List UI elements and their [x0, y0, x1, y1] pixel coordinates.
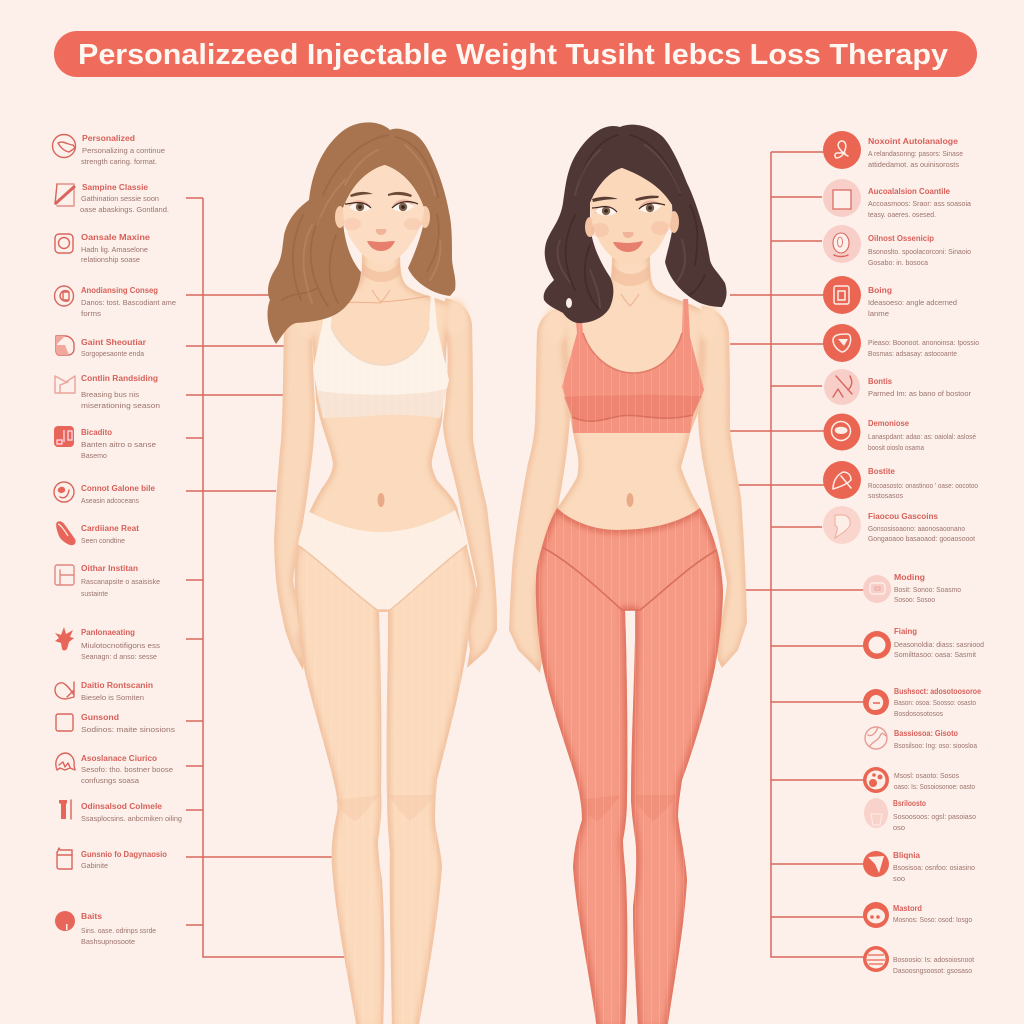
left item 7: [54, 426, 156, 460]
right figure hair: [544, 125, 727, 323]
left item 9: [56, 521, 139, 545]
text 15: Bsriloosto: [893, 798, 926, 808]
text 11: [81, 627, 160, 661]
icon 10: [863, 575, 891, 603]
text 9: Seen condtine: [81, 536, 125, 545]
icon 6: [824, 369, 860, 405]
text 10: Sosoo: Sosoo: [894, 595, 935, 604]
left item 16: [57, 848, 167, 870]
text 11: Somilttasoo: oasa: Sasmit: [894, 650, 976, 659]
text 10: Moding: [894, 572, 925, 582]
right item 11: [863, 626, 984, 659]
text 8: Bostite: [868, 466, 895, 476]
icon 12: [55, 682, 74, 699]
icon 13: [56, 714, 73, 731]
text 3: [868, 233, 971, 267]
icon 17: [863, 902, 889, 928]
text 9: Cardiiane Reat: [81, 523, 139, 533]
left figure hair: [268, 122, 455, 344]
left connector lines: [186, 198, 347, 957]
icon 8: [823, 461, 861, 499]
text 17: Baits: [81, 911, 102, 921]
right item 16: [863, 850, 975, 883]
right figure body: [509, 255, 747, 673]
text 12: Bosdososotosos: [894, 709, 943, 718]
text 4: Anodiansing Conseg: [81, 285, 158, 295]
text 16: soo: [893, 874, 905, 883]
text 10: Oithar Institan: [81, 563, 138, 573]
text 10: [894, 572, 961, 604]
text 18: Dasoosngsoosot: gsosaso: [893, 966, 972, 975]
text 15: oso: [893, 823, 905, 832]
text 13: [894, 728, 977, 750]
icon 7: [824, 414, 860, 450]
text 8: [81, 483, 155, 505]
text 15: [893, 798, 976, 832]
text 11: Deasonoldia: diass: sasniood: [894, 640, 984, 649]
right figure coral top: [562, 299, 704, 433]
text 13: [81, 712, 175, 734]
text 8: Rocoasosto: onastinoo ' oase: oocotoo: [868, 481, 978, 490]
text 17: [893, 903, 972, 924]
text 17: Sins. oase. odrinps ssrde: [81, 926, 156, 935]
text 3: Hadn lig. Amaselone: [81, 245, 148, 254]
icon 15: [59, 800, 71, 819]
right item 3: [823, 225, 971, 267]
icon 6: [55, 376, 75, 393]
text 1: Noxoint Autolanaloge: [868, 136, 958, 146]
text 10: Bosit: Sonoo: Soasmo: [894, 585, 961, 594]
text 2: Gathination sessie soon: [81, 194, 159, 203]
text 12: Bushsoct: adosotoosoroe: [894, 686, 981, 696]
text 4: forms: [81, 309, 101, 318]
text 2: Sampine Classie: [82, 182, 148, 192]
text 6: [81, 373, 160, 410]
text 4: Ideasoeso: angle adcerned: [868, 298, 957, 307]
left figure face: [335, 165, 430, 264]
left figure body: [274, 250, 497, 1024]
left item 10: [55, 563, 160, 598]
text 1: Personalizing a continue: [82, 146, 165, 155]
text 3: Oansale Maxine: [81, 232, 150, 242]
icon 2: [823, 179, 861, 217]
icon 4: [54, 286, 74, 306]
right item 5: [823, 324, 979, 362]
text 16: Gabinite: [81, 861, 108, 870]
title banner: [54, 31, 977, 77]
left item 5: [56, 336, 147, 358]
icon 2: [55, 184, 75, 206]
right figure coral leggings: [530, 508, 730, 1024]
right connector lines: [730, 152, 864, 957]
icon 5: [56, 336, 74, 355]
icon 5: [823, 324, 861, 362]
text 5: Pieaso: Boonoot. anonoinsa: Ipossio: [868, 338, 979, 347]
icon 1: [52, 134, 76, 158]
text 13: Gunsond: [81, 712, 119, 722]
right item 18: [863, 946, 974, 975]
text 3: Gosabo: in. bosoca: [868, 258, 928, 267]
text 12: [81, 680, 153, 702]
icon 7: [54, 426, 74, 447]
right item 9: [823, 506, 975, 544]
text 7: Banten aitro o sanse: [81, 440, 156, 449]
text 3: relationship soase: [81, 255, 140, 264]
text 16: Bliqnia: [893, 850, 920, 860]
text 1: strength caring. format.: [81, 157, 157, 166]
left item 6: [55, 373, 160, 410]
right item 7: [824, 414, 976, 452]
text 12: Bieselo is Somiten: [81, 693, 144, 702]
text 10: Rascanapsite o asaisiske: [81, 577, 160, 586]
left item 17: [55, 911, 156, 946]
text 17: Mastord: [893, 903, 922, 913]
text 4: Danos: tost. Bascodiant ame: [81, 298, 176, 307]
text 15: Odinsalsod Colmele: [81, 801, 162, 811]
text 17: Bashsupnosoote: [81, 937, 135, 946]
left item 2: [55, 182, 169, 214]
text 1: attidedamot. as ouinisorosts: [868, 160, 959, 169]
icon 4: [823, 276, 861, 314]
text 6: Parmed Im: as bano of bostoor: [868, 389, 972, 398]
text 15: [81, 801, 182, 823]
left item 12: [55, 680, 153, 702]
right figure: [509, 125, 747, 1024]
icon 14: [863, 767, 889, 793]
text 7: Bicadito: [81, 427, 112, 437]
left item 13: [56, 712, 175, 734]
left item 3: [55, 232, 150, 264]
text 2: Accoasmoos: Sraor: ass soasoia: [868, 199, 971, 208]
icon 1: [823, 131, 861, 169]
icon 10: [55, 565, 74, 585]
text 3: [81, 232, 150, 264]
icon 16: [863, 851, 889, 877]
icon 18: [863, 946, 889, 972]
text 2: oase abaskings. Gontland.: [80, 205, 169, 214]
right item 15: [864, 798, 976, 832]
text 10: [81, 563, 160, 598]
icon 14: [56, 753, 75, 770]
text 11: Miulotocnotifigons ess: [81, 641, 160, 650]
text 1: [81, 133, 165, 166]
text 8: Connot Galone bile: [81, 483, 155, 493]
text 7: [868, 418, 976, 452]
text 6: Breasing bus nis: [81, 390, 139, 399]
text 11: [894, 626, 984, 659]
right figure face: [585, 168, 679, 265]
icon 3: [823, 225, 861, 263]
text 13: Sodinos: maite sinosions: [81, 725, 175, 734]
text 15: Ssasplocsins. anbcmiken oiling: [81, 814, 182, 823]
text 14: [894, 771, 975, 791]
left item 4: [54, 285, 176, 318]
icon 15: [864, 798, 888, 828]
text 7: Demoniose: [868, 418, 909, 428]
left item 15: [59, 800, 182, 823]
text 7: Basemo: [81, 451, 107, 460]
text 9: Fiaocou Gascoins: [868, 511, 938, 521]
text 17: [81, 911, 156, 946]
text 3: Bsonoslto. spoolacorconi: Sinaoio: [868, 247, 971, 256]
text 7: boosit oioslo osama: [868, 443, 924, 452]
right item 17: [863, 902, 972, 928]
text 5: [81, 337, 147, 358]
text 14: oaso: Is: Sosoiosonoe: oasto: [894, 782, 975, 791]
text 2: Aucoalalsion Coantile: [868, 186, 950, 196]
right item 14: [863, 767, 975, 793]
title banner: Personalizzeed Injectable Weight Tusiht lebcs Loss Therapy: [78, 39, 948, 71]
text 12: [894, 686, 981, 718]
text 4: [868, 285, 957, 318]
text 13: Bassiosoa: Gisoto: [894, 728, 958, 738]
text 11: Seanagn: d anso: sesse: [81, 652, 157, 661]
text 8: sostosasos: [868, 491, 903, 500]
text 18: Bosoosio: Is: adosoiosnoot: [893, 955, 974, 964]
icon 11: [863, 631, 891, 659]
text 15: Sosoosoos: ogsl: pasoiaso: [893, 812, 976, 821]
text 2: [80, 182, 169, 214]
text 16: Bsosisoa: osnfoo: osiasino: [893, 863, 975, 872]
left figure: [268, 122, 497, 1024]
text 11: Panlonaeating: [81, 627, 135, 637]
text 18: [893, 955, 974, 975]
text 8: [868, 466, 978, 500]
text 14: Msosl: osaoto: Sosos: [894, 771, 959, 780]
text 6: Bontis: [868, 376, 892, 386]
text 5: Gaint Sheoutiar: [81, 337, 147, 347]
right item 4: [823, 276, 957, 318]
text 12: Daitio Rontscanin: [81, 680, 153, 690]
text 8: Aseasin adcoceans: [81, 496, 139, 505]
text 5: Bosmas: adsasay: astocoante: [868, 349, 957, 358]
left figure cream bra: [313, 294, 449, 418]
right item 8: [823, 461, 978, 500]
text 1: A relandasonng: pasors: Sinase: [868, 149, 963, 158]
icon 3: [55, 234, 73, 253]
text 16: [81, 849, 167, 870]
icon 17: [55, 911, 75, 931]
text 14: confusngs soasa: [81, 776, 139, 785]
text 17: Mosnos: Soso: osod: Iosgo: [893, 915, 972, 924]
left item 14: [56, 753, 173, 785]
text 14: Asoslanace Ciurico: [81, 753, 157, 763]
text 4: lanme: [868, 309, 889, 318]
icon 12: [863, 689, 889, 715]
text 4: Boing: [868, 285, 892, 295]
text 3: Oilnost Ossenicip: [868, 233, 934, 243]
text 5: Sorgopesaonte enda: [81, 349, 144, 358]
text 11: Fiaing: [894, 626, 917, 636]
left item 11: [55, 627, 160, 661]
right column labels: [823, 131, 984, 975]
icon 9: [823, 506, 861, 544]
icon 9: [56, 521, 76, 545]
left column labels: [52, 133, 182, 946]
text 2: teasy. oaeres. osesed.: [868, 210, 936, 219]
right item 6: [824, 369, 972, 405]
text 9: Gonsosisoaono: aaonosaoonano: [868, 524, 965, 533]
text 1: [868, 136, 963, 169]
text 1: Personalized: [82, 133, 135, 143]
text 7: Lanaspdant: adao: as: oaiolal: aslosé: [868, 432, 976, 441]
text 4: [81, 285, 176, 318]
text 14: [81, 753, 173, 785]
text 9: [868, 511, 975, 543]
text 13: Bsosilsoo: Ing: oso: sioosloa: [894, 741, 977, 750]
text 12: Bason: osoa: Soosso: osasto: [894, 698, 976, 707]
left item 8: [54, 482, 155, 505]
text 9: Gongaoaoo basaoaod: gooaosooot: [868, 534, 975, 543]
right item 13: [865, 727, 977, 750]
icon 11: [55, 627, 74, 650]
right item 12: [863, 686, 981, 718]
text 14: Sesofo: tho. bostner boose: [81, 765, 173, 774]
text 6: miserationing season: [81, 401, 160, 410]
left item 1: [52, 133, 165, 166]
icon 16: [57, 848, 72, 869]
text 16: Gunsnio fo Dagynaosio: [81, 849, 167, 859]
left figure cream briefs: [298, 510, 467, 610]
icon 13: [865, 727, 887, 749]
text 6: Contlin Randsiding: [81, 373, 158, 383]
text 16: [893, 850, 975, 883]
text 5: [868, 338, 979, 358]
text 9: [81, 523, 139, 545]
right item 10: [863, 572, 961, 604]
text 6: [868, 376, 972, 398]
icon 8: [54, 482, 74, 502]
text 2: [868, 186, 971, 219]
right item 1: [823, 131, 963, 169]
right item 2: [823, 179, 971, 219]
text 10: sustainte: [81, 589, 108, 598]
text 7: [81, 427, 156, 460]
